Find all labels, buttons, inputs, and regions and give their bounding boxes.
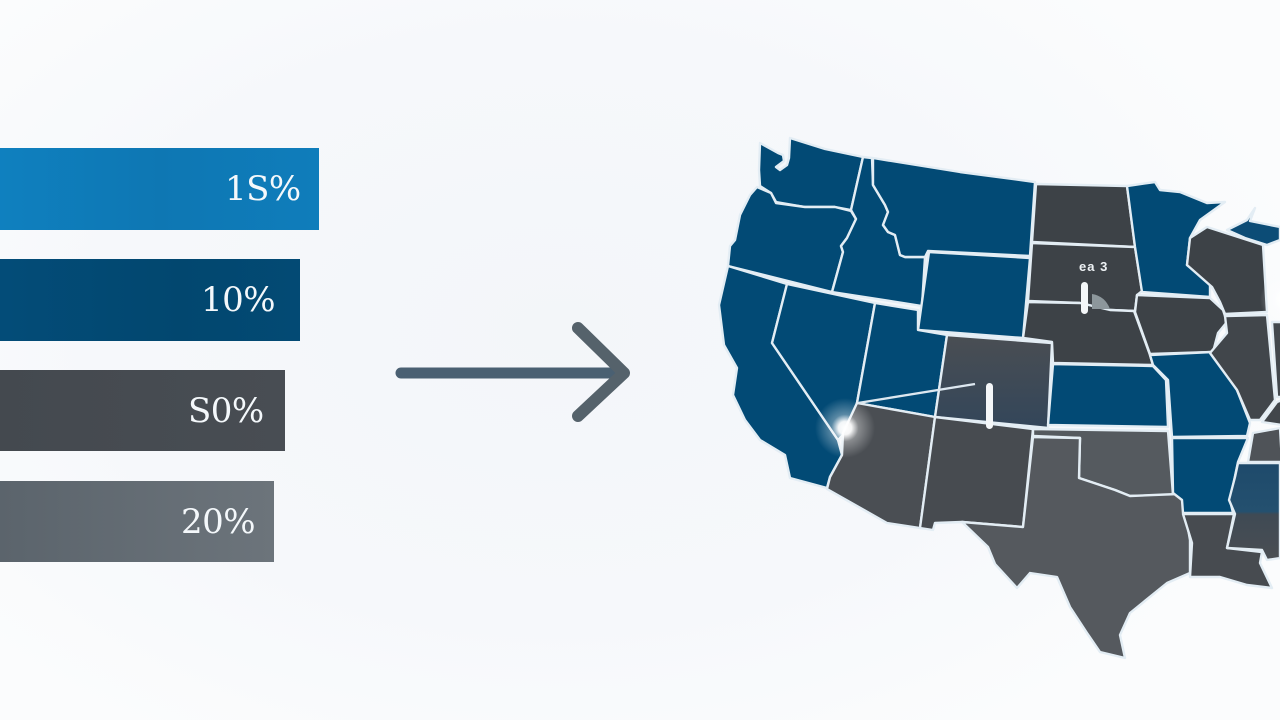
connector line [858, 384, 975, 403]
bar 2: 10% [201, 280, 275, 320]
state: Arizona [827, 403, 935, 528]
state: Washington [759, 138, 863, 210]
state: Oklahoma [1033, 429, 1173, 496]
state: Kentucky and Tennessee [1248, 428, 1280, 462]
glow: south-west [815, 398, 875, 458]
state: Idaho [832, 157, 925, 306]
state: Wyoming [918, 252, 1030, 338]
glow: east [1260, 274, 1280, 326]
state: California [719, 266, 842, 488]
state: Nebraska [1023, 302, 1153, 365]
bar chart [0, 148, 319, 562]
bar 1 [0, 148, 319, 230]
state: Minnesota [1127, 182, 1225, 297]
state: Oregon [728, 187, 856, 292]
state: New Mexico [920, 417, 1033, 530]
map label: ea 3 [1079, 259, 1108, 274]
map pin: upper [1081, 282, 1088, 314]
state: Kentucky edge [1262, 400, 1280, 425]
state: Wisconsin [1187, 227, 1267, 314]
state: Michigan upper peninsula [1227, 208, 1280, 245]
bar 2 [0, 259, 300, 341]
bar 3: S0% [188, 391, 264, 431]
state: North Dakota [1032, 184, 1135, 247]
map pin: lower [986, 383, 993, 429]
state: Texas [962, 437, 1190, 658]
state: Illinois [1210, 315, 1275, 420]
state: Nevada [772, 284, 875, 440]
state: Utah [857, 303, 947, 417]
state: Kansas [1048, 364, 1168, 427]
bar 1: 1S% [225, 169, 301, 209]
bar 4: 20% [181, 502, 255, 542]
bar 3 [0, 370, 285, 451]
state: Indiana [1272, 322, 1280, 397]
state: Montana [873, 158, 1035, 257]
state: Iowa [1135, 295, 1227, 354]
small arc marker [1092, 294, 1110, 309]
state: Arkansas [1172, 438, 1248, 513]
state: Mississippi and Alabama [1227, 463, 1280, 560]
state: Colorado [935, 335, 1052, 428]
state: South Dakota [1028, 243, 1142, 311]
bar 4 [0, 481, 274, 562]
state: Louisiana [1183, 514, 1272, 588]
state: Missouri [1150, 352, 1250, 437]
